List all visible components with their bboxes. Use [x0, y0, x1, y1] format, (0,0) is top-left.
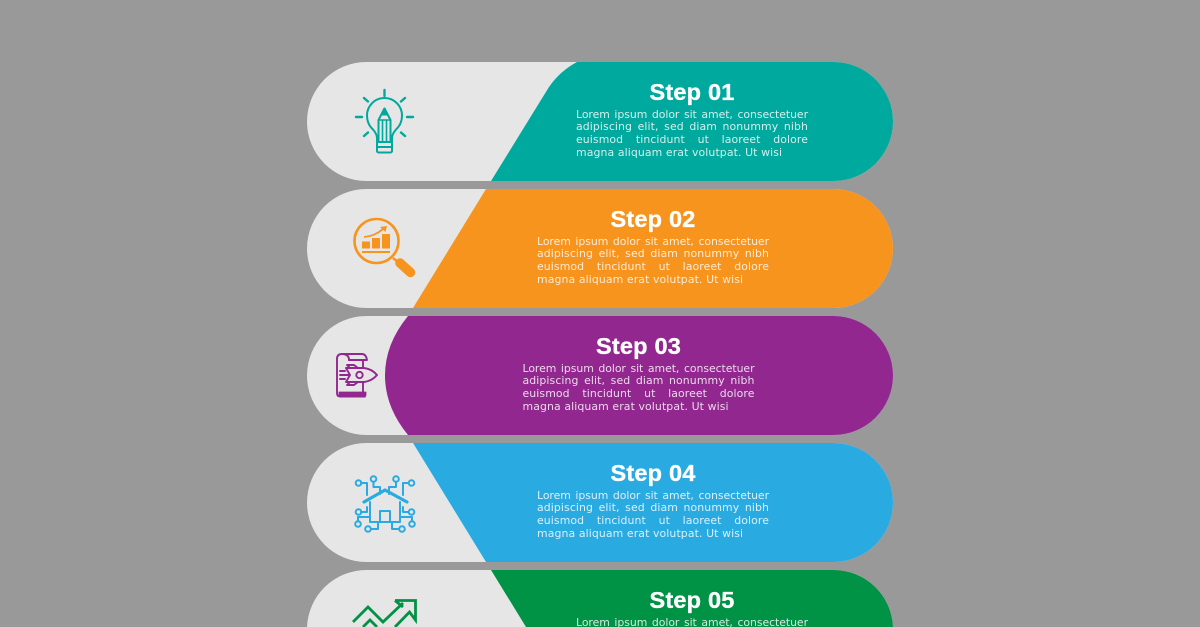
icon: magnifier over growth chart	[354, 219, 410, 272]
bar: step 04	[307, 443, 893, 562]
bar: step 03	[307, 316, 893, 435]
paragraph: step 04: magna aliquam erat volutpat. Ut wisi	[537, 527, 743, 540]
text block: step 03	[522, 332, 755, 413]
paragraph: step 01: magna aliquam erat volutpat. Ut wisi	[576, 146, 782, 159]
paragraph: step 02: adipiscing elit, sed diam nonummy nibh	[537, 247, 769, 260]
bar: step 05	[307, 570, 893, 627]
icon: smart home circuit	[355, 476, 415, 532]
paragraph: step 02: magna aliquam erat volutpat. Ut wisi	[537, 273, 743, 286]
heading: step 03: Step 03	[596, 332, 681, 358]
paragraph: step 02	[537, 235, 770, 286]
paragraph: step 03: euismod tincidunt ut laoreet dolore	[522, 387, 754, 400]
paragraph: step 01: euismod tincidunt ut laoreet dolore	[576, 133, 808, 146]
icon: rising arrows	[353, 600, 416, 627]
text block: step 05	[576, 586, 808, 627]
bar: step 02	[307, 189, 893, 308]
paragraph: step 03	[522, 362, 755, 413]
icon: light bulb with pencil	[356, 90, 413, 152]
heading: step 04: Step 04	[610, 460, 696, 486]
icon: rocket launching from a document	[337, 354, 377, 396]
paragraph: step 02: Lorem ipsum dolor sit amet, consectetuer	[537, 235, 769, 248]
paragraph: step 04: adipiscing elit, sed diam nonummy nibh	[537, 501, 769, 514]
heading: step 05: Step 05	[650, 586, 734, 612]
paragraph: step 03: adipiscing elit, sed diam nonummy nibh	[522, 374, 754, 387]
paragraph: step 02: euismod tincidunt ut laoreet dolore	[537, 260, 769, 273]
text block: step 01	[576, 78, 808, 159]
text block: step 02	[537, 206, 770, 286]
paragraph: step 03: magna aliquam erat volutpat. Ut wisi	[522, 400, 729, 413]
bar: step 01	[307, 62, 893, 181]
paragraph: step 01	[576, 108, 808, 159]
text block: step 04	[537, 460, 770, 540]
paragraph: step 01: Lorem ipsum dolor sit amet, consectetuer	[576, 108, 808, 121]
paragraph: step 04	[537, 489, 770, 540]
heading: step 02: Step 02	[610, 206, 696, 232]
paragraph: step 04: euismod tincidunt ut laoreet dolore	[537, 514, 769, 527]
paragraph: step 01: adipiscing elit, sed diam nonummy nibh	[576, 120, 808, 133]
paragraph: step 03: Lorem ipsum dolor sit amet, consectetuer	[522, 362, 754, 375]
heading: step 01: Step 01	[650, 78, 734, 104]
paragraph: step 04: Lorem ipsum dolor sit amet, consectetuer	[537, 489, 769, 502]
